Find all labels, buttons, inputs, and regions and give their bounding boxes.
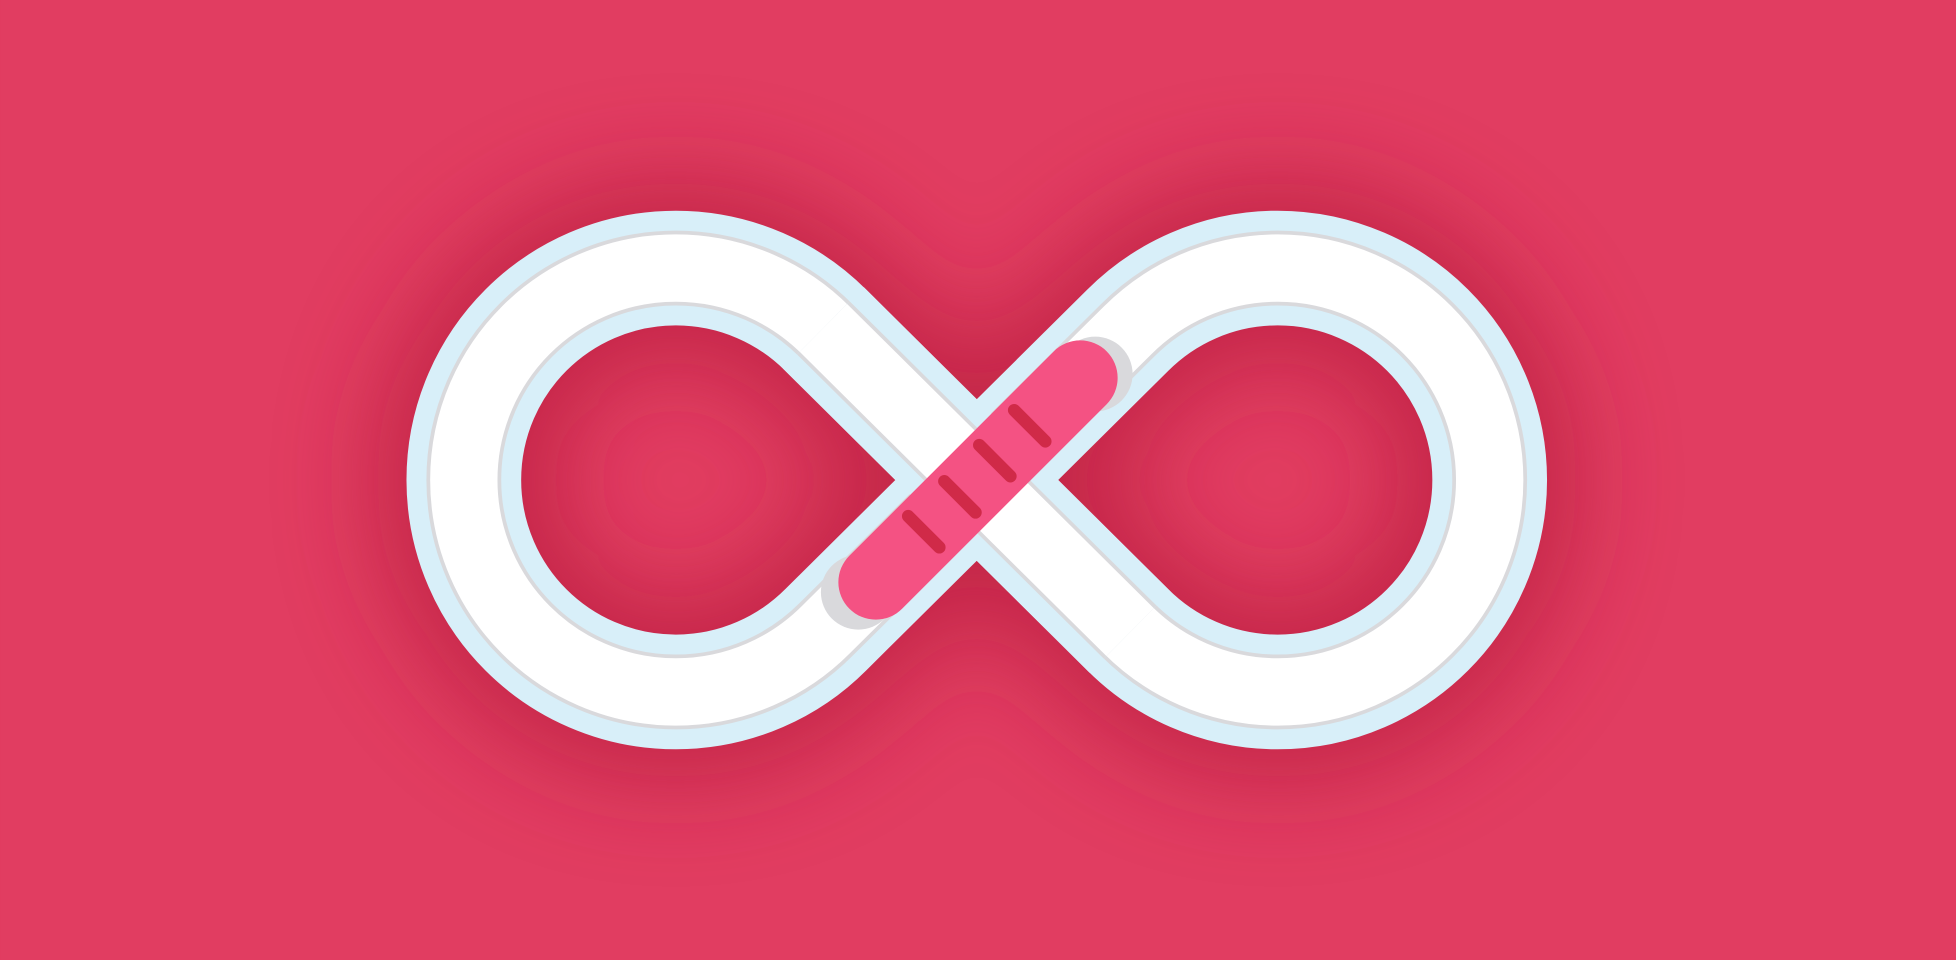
bandage stitches xyxy=(908,410,1045,547)
bandage xyxy=(821,337,1133,630)
top crossing strand xyxy=(823,328,1130,632)
infinity band xyxy=(464,268,1490,692)
shadow glow xyxy=(464,268,1490,692)
